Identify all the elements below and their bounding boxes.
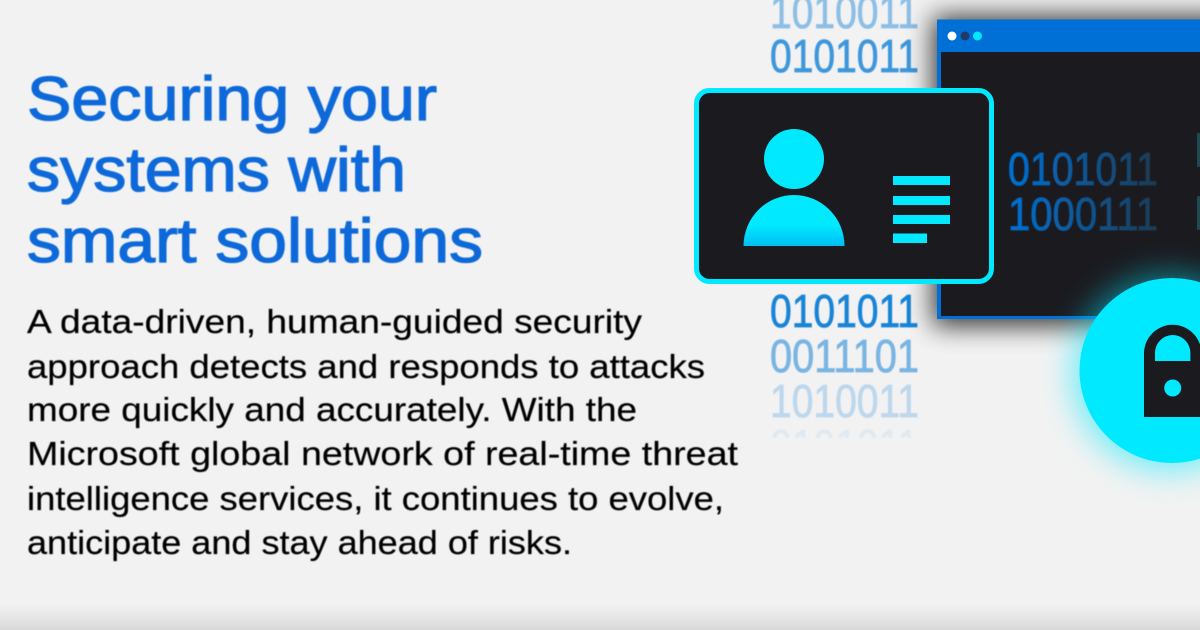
window binary text: 0101011 (1008, 143, 1158, 195)
window drop shadow (933, 16, 1200, 326)
bottom edge shading (0, 604, 1200, 630)
body paragraph: approach detects and responds to attacks (27, 348, 705, 385)
window binary column clipped at edge (1197, 133, 1200, 230)
binary column: lower fading: 0101011 (770, 285, 919, 337)
body paragraph (27, 303, 738, 561)
badge circle (1080, 278, 1200, 463)
binary column: lower fading: 0011101 (770, 330, 919, 382)
title: Securing your (27, 65, 437, 134)
icon: padlock (1144, 325, 1200, 417)
window title-bar dots (948, 32, 982, 40)
binary column: upper (770, 0, 919, 82)
title: smart solutions (27, 207, 483, 276)
card body (696, 90, 992, 282)
lock badge (1072, 275, 1200, 471)
badge glow (1072, 275, 1200, 471)
identity card (696, 90, 992, 282)
body paragraph: anticipate and stay ahead of risks. (27, 524, 572, 561)
window binary text: 1000111 (1008, 188, 1158, 240)
window content area (941, 52, 1200, 316)
body paragraph: A data-driven, human-guided security (27, 303, 643, 340)
body paragraph: intelligence services, it continues to evolve, (27, 480, 724, 517)
window frame (937, 20, 1200, 319)
window binary text (1008, 143, 1158, 240)
body paragraph: more quickly and accurately. With the (27, 391, 637, 428)
body paragraph: Microsoft global network of real-time threat (27, 435, 738, 472)
icon: person (744, 129, 844, 246)
binary column: lower fading: 1010011 (770, 375, 919, 427)
icon: text lines (893, 176, 950, 243)
title (27, 65, 483, 276)
binary column: lower fading (770, 285, 919, 472)
binary column: upper: 0101011 (770, 30, 919, 82)
title: systems with (27, 136, 406, 205)
application window (937, 20, 1200, 319)
